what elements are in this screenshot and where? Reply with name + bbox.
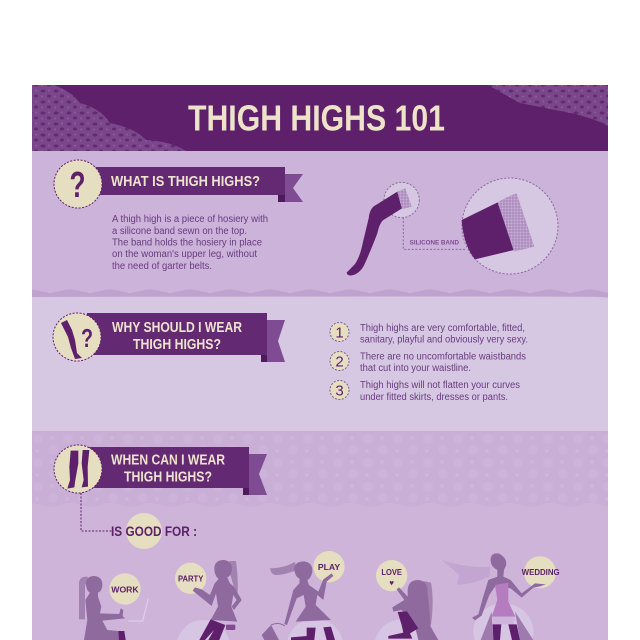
- text block: definition: A thigh high is a piece of hosiery with: [112, 214, 268, 225]
- work bubble: [109, 573, 141, 605]
- text block: definition: a silicone band sewn on the top.: [112, 226, 247, 237]
- section: what is thigh highs: [54, 160, 558, 275]
- section: when can I wear: [54, 445, 560, 640]
- panel: what is thigh highs background: [32, 151, 608, 292]
- icon: question mark badge: [54, 160, 102, 208]
- heading: is good for: [111, 513, 197, 549]
- reason one: [330, 322, 528, 346]
- reason three: Thigh highs will not flatten your curves: [360, 380, 520, 391]
- veil: [442, 560, 491, 585]
- wedding bubble: [524, 556, 556, 588]
- shopping bag: [262, 625, 279, 640]
- ponytail: [423, 581, 433, 625]
- love bubble: [376, 560, 407, 591]
- party bubble: [175, 563, 206, 594]
- label: silicone band: SILICONE BAND: [410, 240, 459, 247]
- text block: definition: [112, 214, 268, 272]
- panel: why should I wear background: [32, 292, 608, 431]
- header banner: [32, 85, 608, 151]
- train: [481, 612, 533, 640]
- reason three: [330, 380, 520, 403]
- figure: work: WORK: [111, 584, 139, 594]
- lace corner right: [488, 85, 608, 126]
- reason two: 2: [335, 354, 344, 370]
- work legs: [118, 631, 126, 640]
- reason one: 1: [335, 324, 344, 342]
- party glow: [177, 620, 229, 640]
- text block: definition: The band holds the hosiery in place: [112, 238, 263, 248]
- reason one: sanitary, playful and obviously very sexy.: [360, 334, 528, 346]
- reason three: 3: [335, 382, 344, 400]
- ponytail: [229, 561, 238, 595]
- figure: wedding: WEDDING: [522, 567, 560, 577]
- party woman: [193, 560, 242, 622]
- icon: leg with question mark: ?: [81, 323, 93, 353]
- text block: definition: the need of garter belts.: [112, 261, 212, 272]
- figure: work: [79, 573, 148, 640]
- lace corner left: [32, 85, 186, 151]
- party legs: [199, 619, 225, 640]
- play bubble: [313, 551, 345, 582]
- work woman: [84, 576, 125, 640]
- reason three: under fitted skirts, dresses or pants.: [360, 392, 508, 403]
- ribbon: what is thigh highs: WHAT IS THIGH HIGHS?: [111, 174, 260, 190]
- play woman: [284, 561, 333, 625]
- reason two: There are no uncomfortable waistbands: [360, 352, 526, 362]
- wedding woman: [472, 553, 546, 620]
- love glow: [375, 619, 428, 640]
- play legs: [291, 627, 335, 640]
- panel: when can I wear background: [32, 431, 608, 640]
- love woman: [392, 580, 438, 640]
- party stool: [226, 625, 235, 630]
- lace band behind section three heading: [20, 431, 620, 507]
- title: THIGH HIGHS 101: [188, 98, 445, 138]
- ribbon: why should I wear: WHY SHOULD I WEAR: [112, 320, 242, 336]
- big lace band: [498, 193, 534, 252]
- section: why should I wear: [53, 313, 528, 403]
- text block: definition: on the woman's upper leg, without: [112, 249, 257, 260]
- icon: pair of stockings: [54, 445, 102, 493]
- figure: party: PARTY: [178, 574, 204, 584]
- illustration: leg with silicone band: [347, 178, 558, 275]
- wedding glow: [473, 603, 533, 640]
- ribbon: why should I wear: [87, 313, 285, 362]
- ribbon: when can I wear: WHEN CAN I WEAR: [111, 452, 225, 468]
- heart: ♥: [389, 579, 394, 588]
- reason one: Thigh highs are very comfortable, fitted,: [360, 323, 525, 334]
- bag handle: [271, 624, 285, 626]
- heading: is good for: IS GOOD FOR :: [111, 523, 197, 539]
- icon: leg with question mark: [53, 313, 101, 361]
- figure: party: [175, 560, 242, 640]
- leg silhouette: [347, 192, 402, 275]
- small magnifier circle: [384, 182, 419, 218]
- laptop: [128, 598, 148, 621]
- garter shorts: [492, 617, 515, 624]
- figure: play: [262, 551, 345, 640]
- big magnifier circle: [462, 178, 558, 274]
- big stocking top: [462, 202, 514, 259]
- ribbon: when can I wear: [87, 447, 267, 495]
- reason two: [330, 352, 526, 374]
- figure: love: [375, 560, 438, 640]
- dress: [492, 583, 515, 617]
- list: reasons: [330, 322, 528, 403]
- small lace band: [397, 188, 412, 209]
- figure: play: PLAY: [318, 562, 340, 572]
- ribbon: what is thigh highs: [90, 167, 303, 202]
- wedding legs: [493, 624, 520, 640]
- reason two: that cut into your waistline.: [360, 363, 471, 374]
- play glow: [287, 618, 343, 640]
- figure: love: LOVE: [381, 567, 402, 577]
- figure: wedding: [442, 553, 560, 640]
- ribbon: why should I wear: THIGH HIGHS?: [133, 337, 221, 353]
- ponytail: [79, 577, 89, 619]
- ribbon: when can I wear: THIGH HIGHS?: [124, 470, 212, 486]
- divider lace band: [0, 290, 620, 298]
- dashed connector to is good for: [81, 493, 112, 531]
- icon: question mark badge: ?: [70, 164, 86, 205]
- love legs: [388, 611, 418, 639]
- ponytail: [270, 562, 297, 575]
- dashed connector: [403, 217, 467, 249]
